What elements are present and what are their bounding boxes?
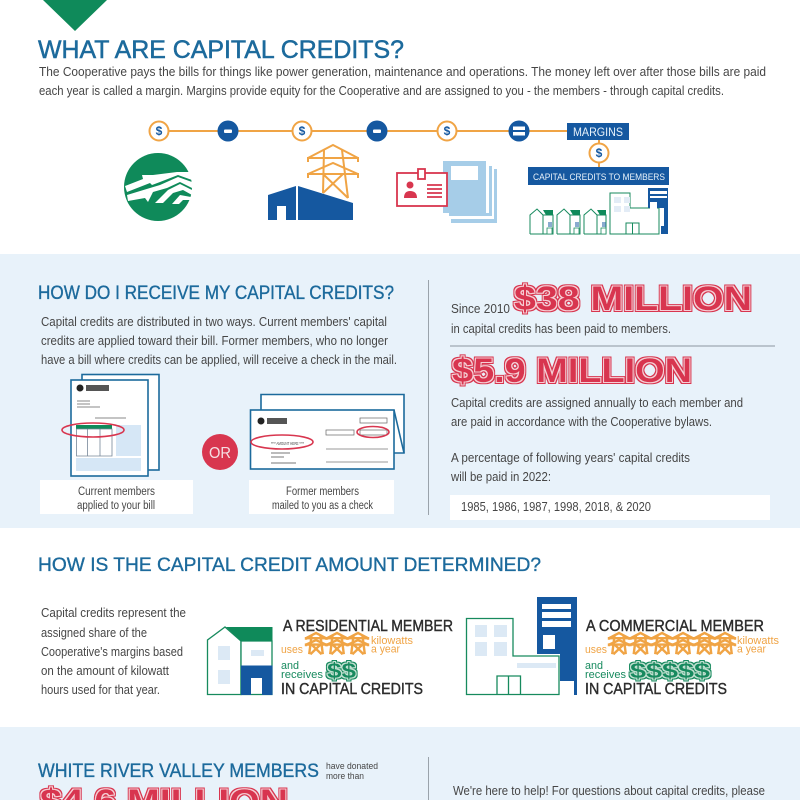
text: assigned share: Cooperative's margins based: [41, 645, 183, 659]
text: percentage paid: will be paid in 2022:: [450, 470, 551, 484]
icon: residential house: [208, 627, 272, 695]
icon: member homes and business: [530, 188, 668, 234]
panel: receiving capital credits: [0, 254, 800, 528]
residential member details: A RESIDENTIAL MEMBER: [283, 618, 453, 635]
commercial member details: kilowatts: [737, 635, 779, 647]
stat: 5.9 million: are paid in accordance with the Cooperative bylaws.: [451, 415, 712, 429]
text: assigned share: [41, 606, 186, 697]
years box: 1985, 1986, 1987, 1998, 2018, & 2020: [461, 500, 651, 514]
icon: bill: [62, 374, 159, 476]
text: assigned share: on the amount of kilowatt: [41, 664, 169, 678]
banner triangle: [43, 0, 107, 31]
commercial member details: a year: [737, 644, 766, 656]
commercial member details: uses: [585, 644, 607, 656]
stat: 38 million: in capital credits has been paid to members.: [451, 322, 671, 336]
text: percentage paid: [450, 451, 690, 484]
heading: white river valley members: have donated: [326, 761, 378, 771]
icon: commercial building: [466, 597, 577, 695]
margin formula flow: $: [156, 124, 163, 138]
icon: power plant and transmission tower: [268, 145, 358, 220]
icon: OR badge: [202, 434, 238, 470]
residential member details: $$: [327, 660, 356, 683]
residential member details: kilowatts: [371, 635, 413, 647]
icon: employee badge and documents: [397, 161, 497, 223]
commercial member details: receives: [585, 669, 626, 681]
caption: current members: Current members: [78, 486, 155, 498]
icon: cooperative logo: [124, 153, 192, 221]
stat: 38 million: [451, 280, 752, 336]
years box: [450, 495, 770, 520]
residential member details: receives: [281, 669, 324, 681]
caption: former members: mailed to you as a check: [272, 500, 373, 512]
stat: 38 million: $38 MILLION: [514, 280, 752, 318]
caption: current members: applied to your bill: [77, 500, 155, 512]
margin formula flow: $: [444, 124, 451, 138]
title: WHAT ARE CAPITAL CREDITS?: [38, 36, 404, 64]
residential member details: a year: [371, 644, 400, 656]
margin formula flow: [150, 120, 669, 185]
commercial member details: and: [585, 660, 603, 672]
caption: former members: Former members: [286, 486, 359, 498]
commercial member details: IN CAPITAL CREDITS: [585, 681, 727, 698]
text: assigned share: assigned share of the: [41, 626, 147, 640]
panel: donations and contact: [0, 727, 800, 800]
margin formula flow: $: [299, 124, 306, 138]
stat: 5.9 million: Capital credits are assigned annually to each member and: [451, 396, 743, 410]
icon: OR badge: OR: [209, 445, 231, 462]
heading: how do I receive: HOW DO I RECEIVE MY CAPITAL CREDITS?: [38, 283, 394, 304]
margin formula flow: $: [596, 146, 603, 160]
commercial member details: [585, 618, 779, 698]
icon: check: **** AMOUNT HERE ****: [271, 441, 304, 446]
heading: white river valley members: more than: [326, 771, 364, 781]
heading: white river valley members: WHITE RIVER VALLEY MEMBERS: [38, 761, 319, 782]
text: assigned share: Capital credits represent the: [41, 606, 186, 620]
commercial member details: $$$$$: [630, 660, 710, 683]
icon: check: [250, 394, 404, 469]
text: distribution: credits are applied toward their bill. Former members, who no longer: [41, 334, 388, 348]
intro text: [39, 65, 766, 98]
heading: how determined: HOW IS THE CAPITAL CREDIT AMOUNT DETERMINED?: [38, 555, 541, 576]
text: distribution: have a bill where credits can be applied, will receive a check in the mail.: [41, 353, 397, 367]
stat: 5.9 million: [451, 352, 743, 429]
residential member details: uses: [281, 644, 303, 656]
intro text: The Cooperative pays the bills for things like power generation, maintenance and operations. The money left over after those bills are paid: [39, 65, 766, 79]
caption: former members: [249, 480, 394, 514]
text: contact: We're here to help! For questions about capital credits, please: [453, 784, 765, 798]
text: assigned share: hours used for that year.: [41, 683, 160, 697]
text: distribution: Capital credits are distributed in two ways. Current members' capital: [41, 315, 387, 329]
residential member details: and: [281, 660, 299, 672]
text: distribution: [41, 315, 397, 367]
stat: 38 million: Since 2010: [451, 302, 510, 316]
stat: 5.9 million: $5.9 MILLION: [452, 352, 692, 390]
text: percentage paid: A percentage of following years' capital credits: [451, 451, 690, 465]
margin formula flow: CAPITAL CREDITS TO MEMBERS: [533, 172, 665, 183]
commercial member details: A COMMERCIAL MEMBER: [586, 618, 764, 635]
residential member details: [281, 618, 453, 698]
residential member details: IN CAPITAL CREDITS: [281, 681, 423, 698]
margin formula flow: MARGINS: [573, 127, 623, 139]
caption: current members: [40, 480, 193, 514]
intro text: each year is called a margin. Margins provide equity for the Cooperative and are assigned to you - the members - through capital credits.: [39, 84, 724, 98]
